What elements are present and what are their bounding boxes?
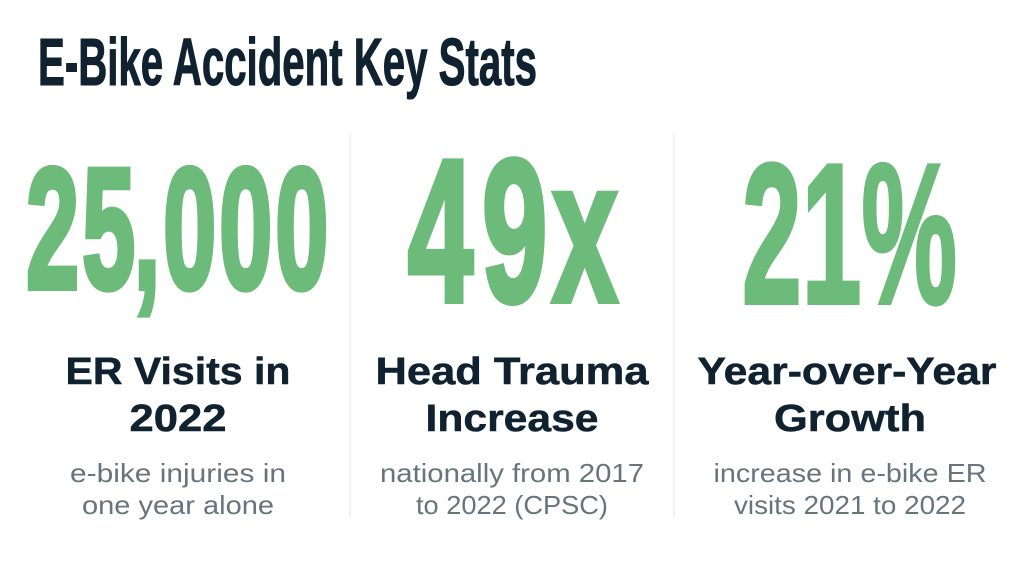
heading: Year-over-Year Growth: Growth [774, 398, 926, 440]
description: increase [714, 458, 986, 520]
description: e-bike injuries [70, 458, 286, 520]
description: nationally [380, 458, 644, 520]
description: e-bike injuries: one year alone [82, 490, 274, 520]
stat: 49x: 49x [408, 119, 618, 345]
stat: 25,000: 25,000 [26, 133, 328, 325]
title: E-Bike Accident Key Stats [38, 25, 537, 100]
heading: ER Visits in 2022: 2022 [130, 398, 226, 440]
description: increase: visits 2021 to 2022 [734, 490, 966, 520]
heading: Head Trauma Increase: Head Trauma [376, 351, 649, 393]
heading: Year-over-Year Growth [698, 351, 997, 440]
heading: Head Trauma Increase [376, 351, 649, 440]
description: increase: increase in e-bike ER [714, 458, 986, 488]
description: nationally: nationally from 2017 [380, 458, 644, 488]
panel: head trauma [376, 119, 649, 520]
heading: ER Visits in 2022: ER Visits in [66, 351, 290, 393]
description: nationally: to 2022 (CPSC) [416, 490, 608, 520]
description: e-bike injuries: e-bike injuries in [70, 458, 286, 488]
heading: Head Trauma Increase: Increase [426, 398, 598, 440]
heading: ER Visits in 2022 [66, 351, 290, 440]
heading: Year-over-Year Growth: Year-over-Year [698, 351, 997, 393]
panel: year-over-year growth [698, 123, 997, 520]
panel: ER visits [26, 133, 328, 520]
